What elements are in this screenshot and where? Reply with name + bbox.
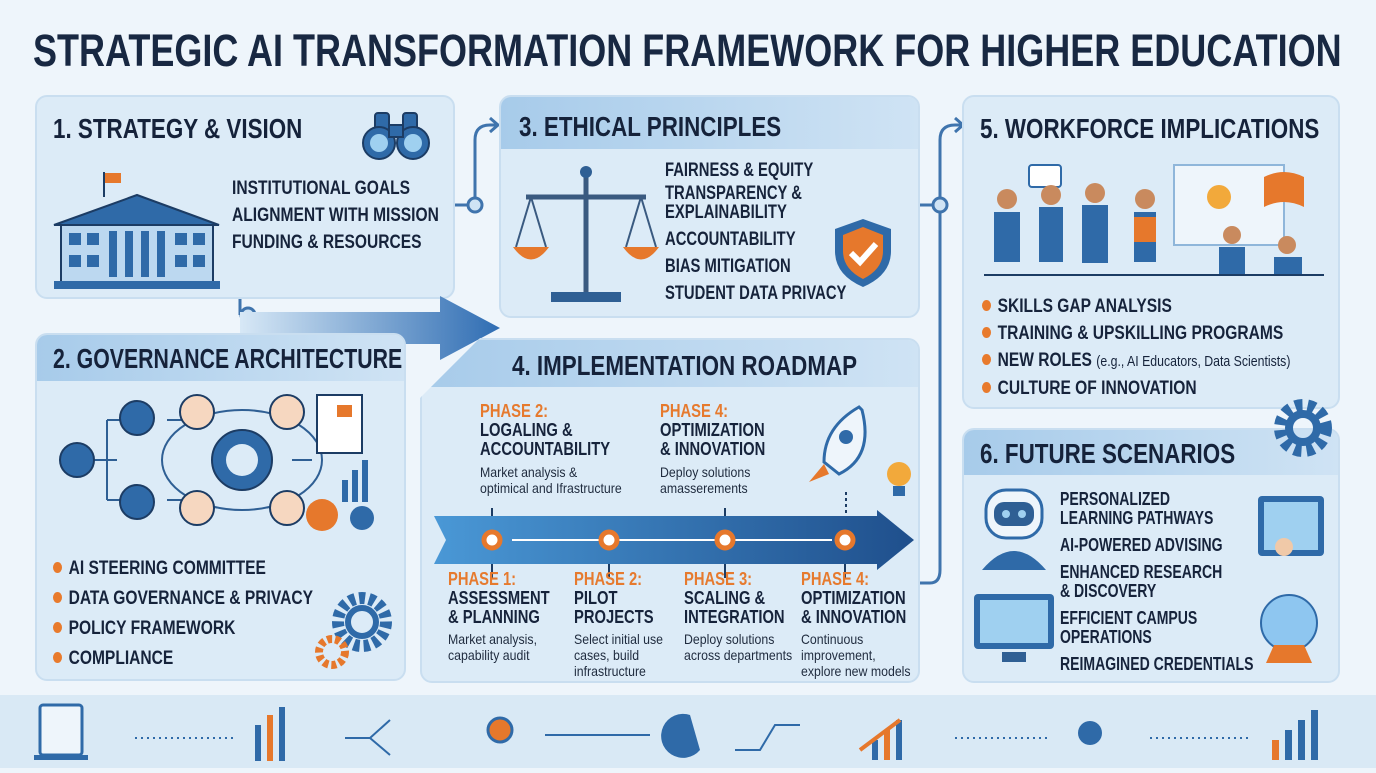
list: scenarios: REIMAGINED CREDENTIALS [1060,654,1253,674]
lower phases: PHASE 1: [448,569,516,589]
panel: implementation roadmap: Market analysis & [480,464,577,480]
panel: implementation roadmap: optimical and Ifrastructure [480,480,622,496]
list: scenarios: & DISCOVERY [1060,581,1156,601]
panel: governance architecture [35,333,406,681]
list: scenarios: ENHANCED RESEARCH [1060,562,1222,582]
panel: workforce implications [962,95,1340,409]
panel: implementation roadmap: amasserements [660,480,748,496]
icon: binoculars [362,112,430,160]
list: ethical principles: BIAS MITIGATION [665,256,791,277]
heading 1: 1. STRATEGY & VISION [53,113,302,144]
panel: future scenarios [962,428,1340,683]
list: scenarios: LEARNING PATHWAYS [1060,508,1213,528]
list: ethical principles: EXPLAINABILITY [665,202,787,223]
panel: implementation roadmap: Deploy solutions [660,464,750,480]
icon: robot [982,488,1046,570]
list: ethical principles: STUDENT DATA PRIVACY [665,283,846,304]
panel: implementation roadmap: improvement, [801,647,876,663]
list: scenarios [1060,489,1253,674]
list: governance items: COMPLIANCE [69,648,173,669]
list: scenarios: AI-POWERED ADVISING [1060,535,1223,555]
title: STRATEGIC AI TRANSFORMATION FRAMEWORK FOR HIGHER EDUCATION [33,25,1342,76]
heading 6: 6. FUTURE SCENARIOS [980,438,1235,469]
panel: strategy & vision [35,95,455,299]
bottom icon strip [0,695,1376,768]
panel: implementation roadmap: PHASE 2: [574,569,642,589]
panel: implementation roadmap: Select initial use [574,631,663,647]
list: governance items: DATA GOVERNANCE & PRIVACY [69,588,313,609]
text: strategy items: ALIGNMENT WITH MISSION [232,205,439,226]
icon: tablet [1258,496,1324,556]
list: governance items [53,558,313,669]
icon: people [984,164,1324,276]
icon: crystal ball [1260,594,1318,663]
icon: shield [835,219,891,287]
timeline [434,508,914,578]
panel: implementation roadmap: PHASE 4: [801,569,869,589]
heading 5: 5. WORKFORCE IMPLICATIONS [980,113,1319,144]
list: workforce items [982,296,1290,399]
panel: implementation roadmap: PHASE 3: [684,569,752,589]
upper phases: ACCOUNTABILITY [480,439,610,459]
panel: implementation roadmap: across departments [684,647,792,663]
list: governance items: AI STEERING COMMITTEE [69,558,266,579]
list: scenarios: OPERATIONS [1060,627,1152,647]
list: ethical principles: TRANSPARENCY & [665,183,802,204]
list: scenarios: PERSONALIZED [1060,489,1170,509]
lower phases [448,572,550,623]
panel: implementation roadmap: PROJECTS [574,607,654,627]
gear decoration [1274,399,1332,457]
panel: implementation roadmap: explore new models [801,663,911,679]
text: strategy items [232,178,439,253]
big arrow [240,296,500,360]
list: scenarios: EFFICIENT CAMPUS [1060,608,1197,628]
list: ethical principles [665,160,846,304]
text: strategy items: INSTITUTIONAL GOALS [232,178,410,199]
list: workforce items: TRAINING & UPSKILLING PROGRAMS [998,323,1283,344]
panel: implementation roadmap: INTEGRATION [684,607,785,627]
panel: implementation roadmap [420,338,920,683]
panel: ethical principles [499,95,920,318]
icon: governance network [59,394,374,531]
panel: implementation roadmap: OPTIMIZATION [660,420,765,440]
heading 3: 3. ETHICAL PRINCIPLES [519,111,781,142]
list: governance items: POLICY FRAMEWORK [69,618,235,639]
panel: implementation roadmap: PHASE 4: [660,401,728,421]
lower phases: ASSESSMENT [448,588,550,608]
text: strategy items: FUNDING & RESOURCES [232,232,422,253]
list: workforce items: NEW ROLES (e.g., AI Educators, Data Scientists) [998,350,1290,371]
list: workforce items: CULTURE OF INNOVATION [998,378,1197,399]
panel: implementation roadmap: Continuous [801,631,863,647]
list: ethical principles: ACCOUNTABILITY [665,229,796,250]
lower phases: & PLANNING [448,607,540,627]
list: workforce items: SKILLS GAP ANALYSIS [998,296,1172,317]
panel: implementation roadmap: Deploy solutions [684,631,774,647]
panel: implementation roadmap: capability audit [448,647,530,663]
upper phases [480,404,610,455]
panel: implementation roadmap: cases, build [574,647,639,663]
upper phases: LOGALING & [480,420,573,440]
panel: implementation roadmap: OPTIMIZATION [801,588,906,608]
panel: implementation roadmap: & INNOVATION [660,439,765,459]
icon: rocket and bulb [809,405,911,513]
icon: scales [513,166,659,302]
list: ethical principles: FAIRNESS & EQUITY [665,160,813,181]
heading 4: 4. IMPLEMENTATION ROADMAP [512,350,857,381]
panel: implementation roadmap: SCALING & [684,588,765,608]
panel: implementation roadmap: Market analysis, [448,631,537,647]
panel: implementation roadmap: & INNOVATION [801,607,906,627]
panel: implementation roadmap: infrastructure [574,663,646,679]
panel: implementation roadmap: PILOT [574,588,617,608]
heading 2: 2. GOVERNANCE ARCHITECTURE [53,343,402,374]
icon: gears [315,592,392,669]
icon: university building [54,172,220,289]
upper phases: PHASE 2: [480,401,548,421]
icon: monitor [974,594,1054,662]
